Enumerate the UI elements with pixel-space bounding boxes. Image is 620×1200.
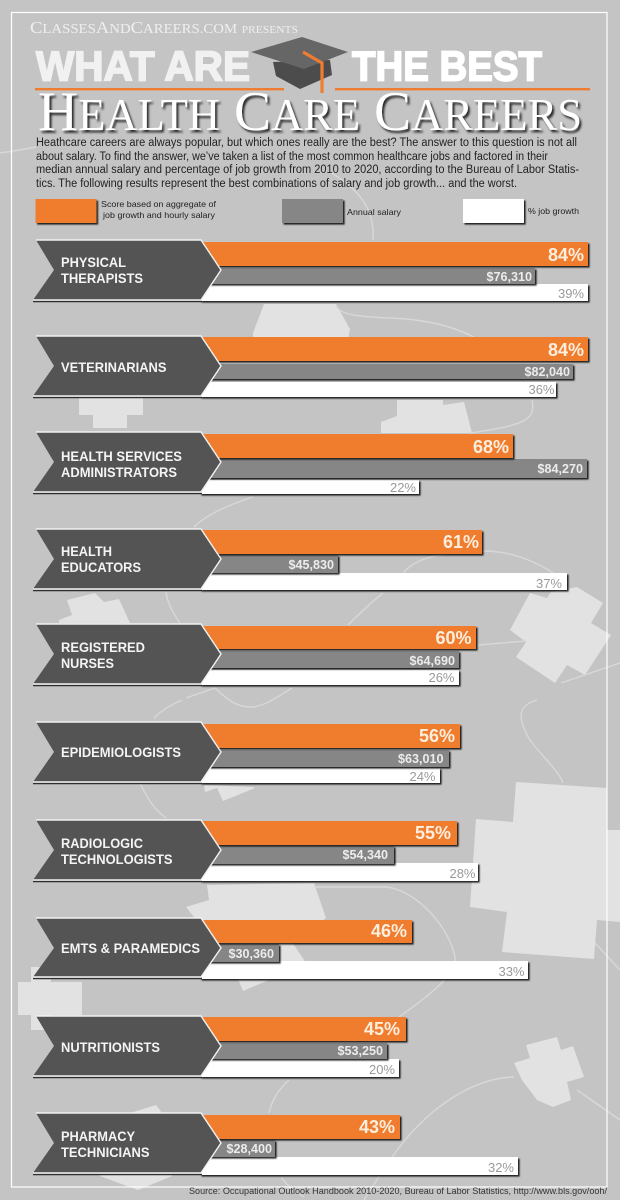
legend: job growth and hourly salary: [102, 210, 216, 220]
row: veterinarians: 36%: [528, 382, 555, 397]
row: radiologic technologists: $54,340: [342, 848, 388, 862]
row: physical therapists: 84%: [548, 245, 584, 265]
row: physical therapists: 39%: [558, 286, 584, 301]
row: health educators: HEALTH: [61, 544, 112, 559]
row: epidemiologists: $63,010: [398, 752, 444, 766]
row: health services administrators: ADMINISTRATORS: [61, 465, 177, 480]
row: veterinarians: VETERINARIANS: [61, 360, 166, 375]
row: health educators: 61%: [443, 532, 479, 552]
row: health services administrators: $84,270: [537, 462, 583, 476]
row: nutritionists: 45%: [364, 1019, 400, 1039]
row: nutritionists: [33, 1016, 406, 1078]
intro paragraph: tics. The following results represent the best combinations of salary and job growth... and the worst.: [36, 178, 517, 190]
row: epidemiologists: 24%: [409, 769, 436, 784]
row: registered nurses: NURSES: [61, 656, 114, 671]
row: health services administrators: HEALTH SERVICES: [61, 449, 182, 464]
intro paragraph: median annual salary and percentage of job growth from 2010 to 2020, according to the Bureau of Labor Statis-: [36, 164, 579, 176]
row: registered nurses: 26%: [428, 670, 455, 685]
legend: Annual salary: [347, 207, 402, 217]
row: pharmacy technicians: 32%: [488, 1160, 514, 1175]
row: radiologic technologists: RADIOLOGIC: [61, 836, 143, 851]
title: health care careers: HEALTH CARE CAREERS: [38, 81, 582, 143]
intro paragraph: [36, 137, 579, 190]
icon: graduation cap: [251, 37, 348, 93]
row: radiologic technologists: 55%: [415, 823, 451, 843]
row: registered nurses: 60%: [435, 628, 472, 648]
row: pharmacy technicians: [33, 1113, 518, 1175]
row: epidemiologists: EPIDEMIOLOGISTS: [61, 745, 181, 760]
row: health services administrators: 22%: [390, 480, 416, 495]
row: nutritionists: $53,250: [337, 1044, 383, 1058]
row: radiologic technologists: [33, 820, 478, 882]
row: physical therapists: THERAPISTS: [61, 271, 143, 286]
row: registered nurses: REGISTERED: [61, 640, 145, 655]
source note: Source: Occupational Outlook Handbook 2010-2020, Bureau of Labor Statistics, http://www.bls.gov/ooh/: [189, 1186, 607, 1197]
row: pharmacy technicians: TECHNICIANS: [61, 1145, 150, 1160]
legend: [36, 199, 579, 223]
intro paragraph: Heathcare careers are always popular, but which ones really are the best? The answer to this question is not all: [36, 137, 577, 149]
row: registered nurses: $64,690: [409, 654, 455, 668]
row: nutritionists: 20%: [369, 1062, 395, 1077]
intro paragraph: about salary. To find the answer, we’ve taken a list of the most common healthcare jobs and factored in their: [36, 151, 548, 163]
presenter line: CLASSES ANDCAREERS.COM PRESENTS: [30, 18, 298, 37]
row: health services administrators: 68%: [473, 437, 509, 457]
row: physical therapists: [33, 240, 588, 302]
row: emts and paramedics: 46%: [371, 921, 407, 941]
row: emts and paramedics: $30,360: [228, 947, 274, 961]
row: health educators: [33, 529, 567, 591]
row: emts and paramedics: 33%: [498, 964, 525, 979]
row: emts and paramedics: EMTS & PARAMEDICS: [61, 941, 200, 956]
orange title rules: [35, 88, 590, 90]
row: emts and paramedics: [33, 918, 528, 979]
row: veterinarians: 84%: [548, 340, 584, 360]
legend: Score based on aggregate of: [101, 199, 217, 209]
title: what are the best: WHAT ARE: [36, 42, 250, 90]
row: radiologic technologists: 28%: [449, 866, 476, 881]
row: health educators: $45,830: [288, 558, 334, 572]
row: veterinarians: $82,040: [524, 365, 570, 379]
row: epidemiologists: 56%: [419, 726, 455, 746]
row: epidemiologists: [33, 722, 460, 784]
row: veterinarians: [33, 336, 588, 398]
row: radiologic technologists: TECHNOLOGISTS: [61, 852, 172, 867]
row: pharmacy technicians: $28,400: [226, 1142, 272, 1156]
title: what are the best: THE BEST: [352, 42, 542, 90]
title: what are the best: [36, 42, 542, 90]
row: pharmacy technicians: PHARMACY: [61, 1129, 135, 1144]
legend: % job growth: [528, 206, 579, 216]
row: health services administrators: [33, 432, 587, 495]
row: health educators: 37%: [536, 576, 562, 591]
row: nutritionists: NUTRITIONISTS: [61, 1040, 160, 1055]
row: pharmacy technicians: 43%: [359, 1117, 395, 1137]
row: registered nurses: [33, 624, 476, 686]
row: health educators: EDUCATORS: [61, 560, 141, 575]
row: physical therapists: $76,310: [486, 270, 532, 284]
row: physical therapists: PHYSICAL: [61, 255, 126, 270]
